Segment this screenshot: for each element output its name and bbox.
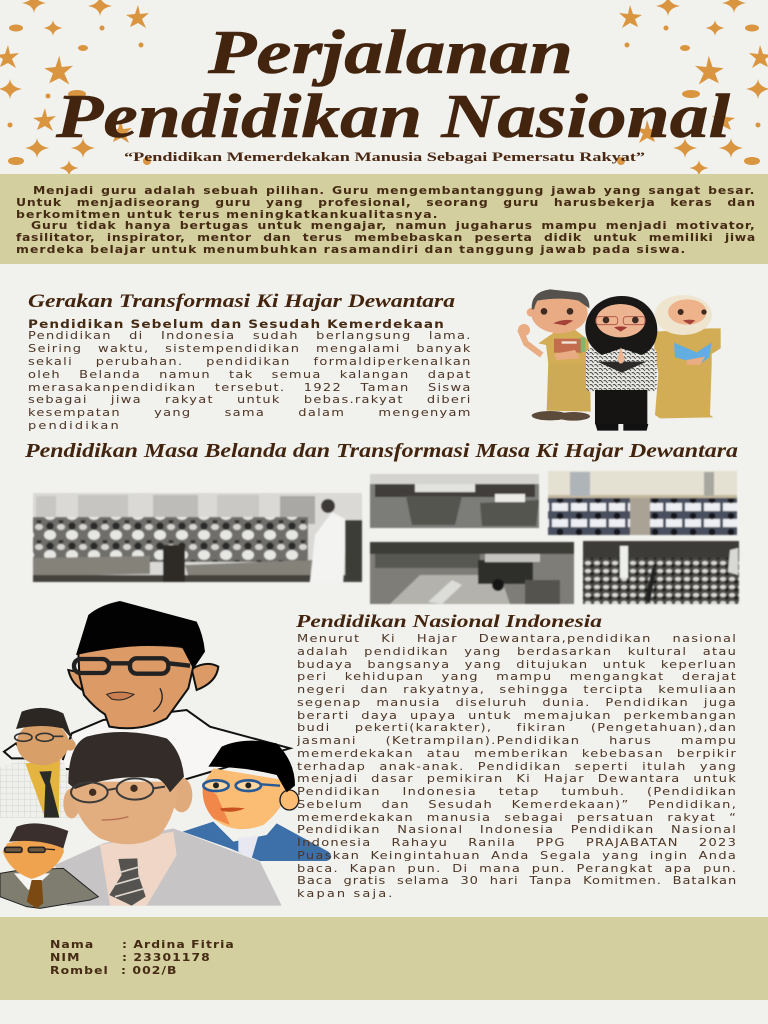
author details bbox=[50, 939, 235, 977]
heading: Gerakan Transformasi: Gerakan Transformasi Ki Hajar Dewantara bbox=[28, 291, 456, 312]
text block: Pendidikan Sebelum dan Sesudah Kemerdekaan bbox=[28, 317, 472, 432]
text block: Pendidikan Nasional Indonesia: negeri dan rakyatnya, sehingga tercipta kemuliaan bbox=[297, 683, 737, 696]
photo: students at desks bbox=[370, 474, 539, 528]
photo: trucks on road bbox=[370, 542, 574, 604]
photo: colour classroom bbox=[548, 471, 737, 535]
portrait: figure in white checked suit bbox=[0, 708, 80, 818]
decorative stars left and right bbox=[0, 0, 768, 174]
text block: Pendidikan Nasional Indonesia: memerdekakan manusia sebagai persatuan rakyat “ bbox=[297, 811, 737, 824]
heading: Pendidikan Masa Belanda: Pendidikan Masa Belanda dan Transformasi Masa Ki Hajar Dewantara bbox=[24, 441, 738, 462]
illustration: portraits of national figures bbox=[0, 601, 332, 909]
portrait: large figure in white shirt bbox=[60, 601, 290, 780]
text block: Pendidikan Nasional Indonesia: menjadi dasar pemikiran Ki Hajar Dewantara untuk bbox=[297, 772, 737, 785]
portrait: center figure in grey suit bbox=[55, 732, 282, 906]
intro text: merdeka belajar untuk menumbuhkan rasamandiri dan tanggung jawab pada siswa. bbox=[16, 244, 686, 256]
right teacher in hijab bbox=[654, 295, 721, 418]
illustration: three teachers bbox=[517, 289, 721, 431]
text block: Pendidikan Nasional Indonesia: Sebelum dan Sesudah Kemerdekaan)” Pendidikan, bbox=[297, 798, 737, 811]
subtitle quote: “Pendidikan Memerdekakan Manusia Sebagai Pemersatu Rakyat” bbox=[124, 149, 645, 164]
text block: Pendidikan Sebelum dan Sesudah Kemerdekaan: sekali perubahan. pendidikan formaldiperkenalkan bbox=[28, 355, 472, 368]
author details: NIM bbox=[50, 952, 80, 964]
text block: Pendidikan Sebelum dan Sesudah Kemerdekaan: Seiring waktu, sistempendidikan mengalami banyak bbox=[28, 342, 472, 355]
text block: Pendidikan Nasional Indonesia: Puaskan Keingintahuan Anda Segala yang ingin Anda bbox=[297, 849, 737, 862]
author details: : 002/B bbox=[121, 965, 178, 977]
text block: Pendidikan Nasional Indonesia: baca. Kapan pun. Di mana pun. Perangkat apa pun. bbox=[297, 862, 737, 875]
intro text bbox=[16, 185, 756, 256]
center teacher in black hijab bbox=[585, 296, 657, 431]
text block: Pendidikan Nasional Indonesia: terhadap anak-anak. Pendidikan seperti itulah yang bbox=[297, 760, 737, 773]
heading: Pendidikan Nasional Indonesia: Pendidikan Nasional Indonesia bbox=[295, 611, 602, 631]
text block: Pendidikan Nasional Indonesia: peri kehidupan yang mampu mengangkat derajat bbox=[297, 670, 737, 683]
intro text: berkomitmen untuk terus meningkatkankualitasnya. bbox=[16, 209, 439, 221]
photo: classroom with teacher bbox=[33, 493, 362, 582]
portrait: figure in blue shirt bbox=[183, 741, 331, 861]
title: Pendidikan Nasional bbox=[55, 83, 731, 151]
portrait: figure in grey-brown suit bbox=[0, 823, 98, 908]
author details: Nama bbox=[50, 939, 94, 951]
intro text: fasilitator, inspirator, mentor dan terus membebaskan peserta didik untuk memiliki jiwa bbox=[16, 232, 756, 244]
title: Perjalanan bbox=[207, 19, 573, 87]
historic photo collage bbox=[32, 470, 740, 605]
text block: Pendidikan Nasional Indonesia: Pendidikan Indonesia tetap tumbuh. (Pendidikan bbox=[297, 785, 737, 798]
author details: : 23301178 bbox=[122, 952, 211, 964]
text block: Pendidikan Sebelum dan Sesudah Kemerdekaan: kesempatan yang sama dalam mengenyam bbox=[28, 406, 472, 419]
author details: : Ardina Fitria bbox=[122, 939, 235, 951]
left teacher with book bbox=[518, 289, 591, 421]
author details: Rombel bbox=[50, 965, 109, 977]
intro text: Guru tidak hanya bertugas untuk mengajar, namun jugaharus mampu menjadi motivator, bbox=[31, 220, 756, 232]
intro text: Menjadi guru adalah sebuah pilihan. Guru mengembantanggung jawab yang sangat besar. bbox=[33, 185, 755, 197]
text block: Pendidikan Sebelum dan Sesudah Kemerdekaan: sebagai jiwa rakyat untuk bebas.rakyat diberi bbox=[28, 393, 472, 406]
text block: Pendidikan Nasional Indonesia: kapan saja. bbox=[297, 887, 395, 900]
text block: Pendidikan Sebelum dan Sesudah Kemerdekaan: Pendidikan di Indonesia sudah berlangsung lama. bbox=[28, 329, 472, 342]
text block: Pendidikan Nasional Indonesia: memerdekakan atau memberikan kebebasan berpikir bbox=[297, 747, 737, 760]
text block: Pendidikan Nasional Indonesia: berarti daya upaya untuk memajukan perkembangan bbox=[297, 709, 737, 722]
text block: Pendidikan Sebelum dan Sesudah Kemerdekaan: Pendidikan Sebelum dan Sesudah Kemerdekaan bbox=[28, 317, 445, 331]
text block: Pendidikan Nasional Indonesia: budi pekerti(karakter), fikiran (Pengetahuan),dan bbox=[297, 721, 737, 734]
text block: Pendidikan Nasional Indonesia bbox=[297, 632, 737, 900]
intro text: Untuk menjadiseorang guru yang profesional, seorang guru harusbekerja keras dan bbox=[16, 197, 756, 209]
photo: crowd rally bbox=[583, 541, 739, 604]
text block: Pendidikan Nasional Indonesia: segenap manusia diseluruh dunia. Pendidikan juga bbox=[297, 696, 737, 709]
text block: Pendidikan Nasional Indonesia: jasmani (Ketrampilan).Pendidikan harus mampu bbox=[297, 734, 737, 747]
text block: Pendidikan Nasional Indonesia: budaya bangsanya yang ditujukan untuk keperluan bbox=[297, 658, 737, 671]
panel: introduction bbox=[0, 174, 768, 264]
text block: Pendidikan Nasional Indonesia: Baca gratis selama 30 hari Tanpa Komitmen. Batalkan bbox=[297, 874, 737, 887]
panel: author identity bbox=[0, 917, 768, 1000]
text block: Pendidikan Nasional Indonesia: Pendidikan Nasional Indonesia Pendidikan Nasional bbox=[297, 823, 737, 836]
text block: Pendidikan Sebelum dan Sesudah Kemerdekaan: oleh Belanda namun tak semua kalangan dapat bbox=[28, 368, 472, 381]
text block: Pendidikan Nasional Indonesia: adalah pendidikan yang berdasarkan kultural atau bbox=[297, 645, 737, 658]
text block: Pendidikan Nasional Indonesia: Menurut Ki Hajar Dewantara,pendidikan nasional bbox=[297, 632, 737, 645]
text block: Pendidikan Nasional Indonesia: Indonesia Rahayu Ranila PPG PRAJABATAN 2023 bbox=[297, 836, 737, 849]
text block: Pendidikan Sebelum dan Sesudah Kemerdekaan: pendidikan bbox=[28, 419, 121, 432]
title bbox=[55, 19, 731, 151]
text block: Pendidikan Sebelum dan Sesudah Kemerdekaan: merasakanpendidikan tersebut. 1922 Taman Siswa bbox=[28, 381, 472, 394]
